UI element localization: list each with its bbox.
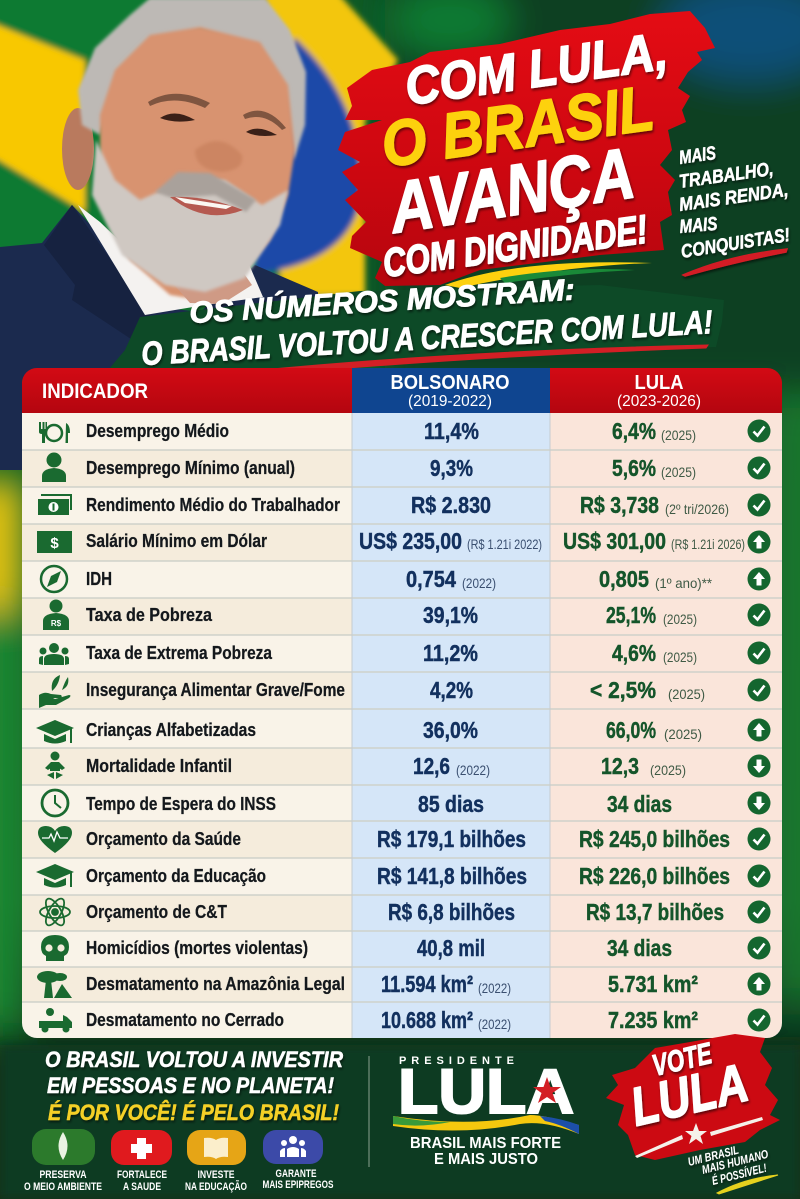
icon: atom (40, 896, 70, 928)
row: orçamento c&t: R$ 6,8 bilhões (388, 899, 515, 925)
subheading text (140, 272, 714, 372)
row: insegurança alimentar (39, 675, 770, 708)
row: mortalidade infantil: Mortalidade Infantil (86, 756, 232, 776)
row: orçamento educação: R$ 226,0 bilhões (579, 863, 730, 889)
icon: graduation cap (36, 864, 74, 888)
icon: heart pulse (38, 826, 72, 853)
row: desemprego mínimo: Desemprego Mínimo (anual) (86, 458, 295, 478)
row: orçamento educação: R$ 141,8 bilhões (377, 863, 527, 889)
row: orçamento c&t (40, 896, 770, 928)
neck (170, 268, 252, 304)
row: desmatamento amazônia: Desmatamento na Amazônia Legal (86, 974, 345, 994)
row: salário mínimo (37, 530, 770, 554)
row: homicídios: 40,8 mil (417, 935, 485, 961)
logo tagline: E MAIS JUSTO (434, 1151, 538, 1168)
subheading text: OS NÚMEROS MOSTRAM: (188, 272, 576, 330)
vote tagline: UM BRASIL (686, 1143, 740, 1169)
logo tagline: BRASIL MAIS FORTE (410, 1135, 561, 1152)
row: idh: 0,754 (406, 566, 456, 592)
header: lula (618, 375, 700, 410)
caption: O MEIO AMBIENTE (24, 1181, 102, 1193)
row: salário mínimo: (R$ 1.21i 2022) (467, 536, 542, 552)
row: taxa de pobreza: 39,1% (423, 602, 478, 628)
row: taxa de pobreza (43, 600, 770, 630)
icon: clock (42, 790, 68, 816)
caption: PRESERVA (40, 1169, 87, 1181)
row: idh: (2022) (462, 575, 496, 591)
row: desmatamento amazônia: (2022) (478, 980, 511, 996)
subheading underline (150, 345, 708, 385)
icon: banknotes (38, 494, 72, 515)
side slogan (678, 143, 791, 276)
row: extrema pobreza: (2025) (663, 649, 697, 665)
row: insegurança alimentar: (2025) (668, 686, 705, 702)
row: desemprego mínimo: 9,3% (430, 455, 473, 481)
row: mortalidade infantil: 12,6 (413, 753, 450, 779)
vote tagline (686, 1143, 778, 1194)
icon: dollar bill (37, 531, 72, 553)
row: idh: (1º ano)** (655, 575, 713, 591)
row: taxa de pobreza: (2025) (663, 611, 697, 627)
suit (0, 205, 318, 470)
row: desemprego médio: Desemprego Médio (86, 421, 229, 441)
row: desemprego mínimo (42, 452, 770, 482)
vote tagline: MAIS HUMANO (700, 1147, 770, 1177)
row: insegurança alimentar: < 2,5% (590, 677, 656, 703)
divider (368, 1056, 370, 1167)
vote text: VOTE (649, 1037, 716, 1083)
caption: MAIS EPIPREGOS (262, 1179, 334, 1191)
row: desmatamento cerrado: Desmatamento no Cerrado (86, 1010, 284, 1030)
row: orçamento c&t: Orçamento de C&T (86, 902, 227, 922)
mouth (170, 197, 243, 215)
eyebrows (148, 94, 286, 130)
slogan lines: MAIS (679, 214, 719, 238)
row: taxa de pobreza: 25,1% (606, 602, 656, 628)
row: rendimento médio: R$ 3,738 (580, 492, 659, 518)
row: salário mínimo: Salário Mínimo em Dólar (86, 531, 267, 551)
portrait (0, 0, 318, 470)
icon: dollar bill: $ (50, 535, 59, 552)
row: tempo de espera: 34 dias (607, 791, 672, 817)
row: salário mínimo: US$ 235,00 (359, 528, 462, 554)
flag swoosh (393, 1115, 579, 1134)
line: avança: AVANÇA (383, 133, 640, 249)
slogan underline (683, 249, 787, 276)
icon: fork and plate (39, 422, 70, 443)
row: rendimento médio (38, 492, 770, 518)
slogan lines (678, 143, 791, 263)
caption: INVESTE (198, 1169, 234, 1181)
row: orçamento saúde: Orçamento da Saúde (86, 829, 241, 849)
row: extrema pobreza: Taxa de Extrema Pobreza (86, 643, 273, 663)
header: indicador: INDICADOR (42, 380, 148, 403)
row: orçamento c&t: R$ 13,7 bilhões (586, 899, 724, 925)
row: mortalidade infantil (45, 752, 770, 779)
vote text (625, 1037, 754, 1138)
row: orçamento saúde: R$ 179,1 bilhões (377, 826, 526, 852)
line: o brasil: O BRASIL (377, 71, 658, 181)
vote lula brush (606, 1034, 780, 1160)
row: orçamento saúde: R$ 245,0 bilhões (579, 826, 730, 852)
row: mortalidade infantil: (2025) (650, 762, 686, 778)
row: homicídios: Homicídios (mortes violentas) (86, 938, 308, 958)
badge: meio ambiente (24, 1129, 102, 1193)
row: desemprego médio: (2025) (661, 427, 696, 443)
row: extrema pobreza (39, 640, 770, 666)
caption (117, 1169, 167, 1193)
row: crianças alfabetizadas: (2025) (664, 726, 702, 742)
icon: star (533, 1077, 561, 1103)
caption (185, 1169, 247, 1193)
star and strokes (635, 1117, 763, 1158)
icon: person (42, 452, 66, 482)
row: idh: 0,805 (599, 566, 649, 592)
icon: compass (41, 566, 67, 592)
hair (78, 0, 306, 160)
row: mortalidade infantil: (2022) (456, 762, 490, 778)
beard (92, 140, 288, 292)
icon: truck with logs (39, 1008, 72, 1032)
slogan lines: TRABALHO, (678, 159, 775, 193)
caption: GARANTE (276, 1168, 316, 1180)
icon: baby (45, 752, 65, 779)
row: desmatamento cerrado (39, 1007, 770, 1033)
row: desemprego mínimo: 5,6% (612, 455, 656, 481)
row: tempo de espera: Tempo de Espera do INSS (86, 794, 276, 814)
headline swoosh (445, 262, 652, 288)
vote tagline: É POSSÍVEL! (710, 1160, 768, 1188)
row: idh: IDH (86, 569, 112, 589)
row: desmatamento cerrado: 10.688 km² (381, 1007, 473, 1033)
line: com lula: COM LULA, (401, 22, 671, 117)
row: desemprego médio: 6,4% (612, 418, 656, 444)
flag backdrop (0, 0, 398, 310)
header: lula: LULA (634, 372, 684, 394)
row: tempo de espera: 85 dias (418, 791, 484, 817)
headline (377, 22, 671, 286)
header: bolsonaro: (2019-2022) (408, 393, 492, 410)
row: orçamento educação (36, 863, 770, 889)
row: extrema pobreza: 4,6% (612, 640, 656, 666)
footer message (45, 1047, 343, 1125)
badge: educação (185, 1130, 247, 1193)
yellow stroke (717, 1175, 778, 1194)
caption: FORTALECE (117, 1169, 167, 1181)
row: insegurança alimentar: 4,2% (430, 677, 473, 703)
row: idh (41, 566, 770, 592)
row: homicídios: 34 dias (607, 935, 672, 961)
comparison table (22, 368, 782, 1038)
icon: hand with leaf (39, 675, 70, 708)
icon: leaf (58, 1132, 68, 1160)
row: desmatamento amazônia (37, 971, 770, 998)
caption (262, 1168, 334, 1191)
column backgrounds (22, 413, 782, 1038)
icon: book (204, 1138, 228, 1159)
line: com dignidade: COM DIGNIDADE! (380, 208, 650, 286)
row: extrema pobreza: 11,2% (423, 640, 478, 666)
caption: NA EDUCAÇÃO (185, 1180, 247, 1193)
slogan lines: MAIS (678, 143, 718, 169)
row: desmatamento cerrado: (2022) (478, 1016, 511, 1032)
footer message: EM PESSOAS E NO PLANETA! (47, 1073, 334, 1098)
row: desmatamento amazônia: 5.731 km² (608, 971, 698, 997)
row: orçamento educação: Orçamento da Educação (86, 866, 266, 886)
eyes (160, 113, 277, 136)
row: homicídios (41, 935, 770, 961)
row: crianças alfabetizadas: Crianças Alfabetizadas (86, 720, 256, 740)
header: lula: (2023-2026) (617, 393, 701, 410)
row: desmatamento cerrado: 7.235 km² (608, 1007, 698, 1033)
row: salário mínimo: (R$ 1.21i 2026) (671, 536, 745, 552)
row: desemprego médio (39, 418, 770, 444)
badge: empregos (262, 1130, 334, 1191)
row: mortalidade infantil: 12,3 (601, 753, 639, 779)
footer message: O BRASIL VOLTOU A INVESTIR (45, 1047, 343, 1072)
row: orçamento saúde (38, 826, 770, 853)
row: rendimento médio: R$ 2.830 (411, 492, 491, 518)
row: desmatamento amazônia: 11.594 km² (381, 971, 473, 997)
icon: skull (41, 935, 69, 961)
lula wordmark: LULA (398, 1057, 574, 1127)
icon: tree and deforestation (37, 971, 72, 998)
lula text: LULA (625, 1053, 754, 1138)
row: crianças alfabetizadas: 36,0% (423, 717, 478, 743)
ear (62, 108, 94, 190)
row: crianças alfabetizadas (36, 717, 770, 744)
icon: person with money: R$ (51, 619, 62, 628)
icon: person with money (43, 600, 69, 630)
subheading banner (103, 272, 724, 385)
table header (22, 368, 782, 413)
row: desemprego médio: 11,4% (424, 418, 479, 444)
logo: presidente lula (393, 1055, 579, 1168)
row: rendimento médio: (2º tri/2026) (665, 501, 729, 517)
row: taxa de pobreza: Taxa de Pobreza (86, 605, 213, 625)
icon: cross (131, 1138, 152, 1159)
headline brush (338, 11, 715, 286)
row: insegurança alimentar: Insegurança Alimentar Grave/Fome (86, 680, 345, 700)
row: desemprego mínimo: (2025) (661, 464, 696, 480)
icon: people (280, 1136, 306, 1157)
nose (195, 141, 242, 172)
shirt collar (78, 205, 263, 315)
mustache (155, 172, 256, 212)
row: crianças alfabetizadas: 66,0% (606, 717, 656, 743)
presidente: PRESIDENTE (399, 1055, 514, 1067)
row: salário mínimo: US$ 301,00 (563, 528, 666, 554)
header: bolsonaro (392, 375, 509, 410)
row: rendimento médio: Rendimento Médio do Trabalhador (86, 495, 340, 515)
face (100, 27, 295, 300)
caption (24, 1169, 102, 1193)
header: bolsonaro: BOLSONARO (390, 372, 510, 394)
caption: A SAUDE (123, 1181, 161, 1193)
footer message: É POR VOCÊ! É PELO BRASIL! (48, 1100, 339, 1125)
icon: graduation cap (36, 720, 74, 744)
teeth (175, 197, 232, 209)
row: tempo de espera (42, 790, 770, 817)
logo tagline (410, 1135, 561, 1168)
icon: group (39, 643, 69, 665)
badge: saúde (111, 1130, 172, 1193)
